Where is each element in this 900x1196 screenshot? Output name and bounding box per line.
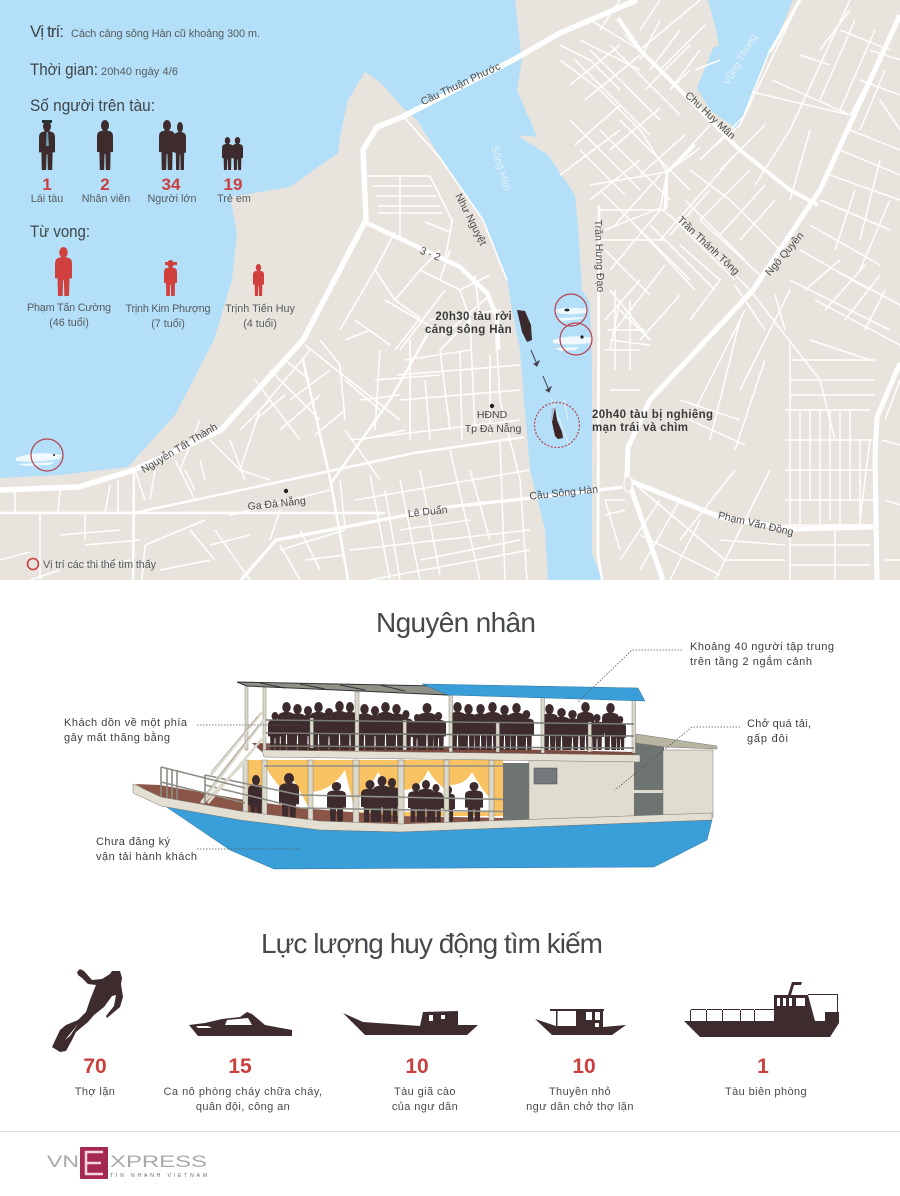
victim 1 — [27, 247, 111, 329]
street labels: Như Nguyệt — [452, 192, 489, 248]
figure: captain: 1 — [42, 175, 52, 194]
arrow 2 — [543, 376, 551, 392]
stat: small boats: ngư dân chở thợ lặn — [526, 1101, 634, 1113]
heading: causes: Nguyên nhân — [376, 607, 536, 638]
panel: map — [0, 0, 900, 580]
legend: Vị trí các thi thể tìm thấy — [43, 559, 157, 571]
main roads — [0, 0, 637, 490]
water: Vũng Thùng bay — [697, 0, 793, 128]
heading: people on board: Số người trên tàu: — [30, 96, 155, 115]
figure: crew: Nhân viên — [82, 193, 130, 205]
figure: adults: 34 — [162, 175, 181, 194]
figure: children: 19 — [224, 175, 242, 194]
rear cabin — [663, 750, 713, 817]
land: east bank — [515, 0, 900, 580]
street labels: Tp Đà Nẵng — [465, 422, 521, 435]
stat: patrol boat — [725, 1055, 807, 1098]
street labels — [139, 32, 806, 539]
heading: deaths: Từ vong: — [30, 222, 90, 241]
heading: search forces: Lực lượng huy động tìm kiếm — [261, 928, 603, 959]
callout: unregistered — [96, 836, 300, 863]
info: location: Cách cảng sông Hàn cũ khoảng 300 m. — [71, 28, 260, 40]
icon: diver — [52, 969, 123, 1052]
stat: trawlers: Tàu giã cào — [394, 1086, 456, 1098]
stat: trawlers — [392, 1055, 458, 1113]
ship at 20h30 — [517, 310, 532, 342]
victim 2 — [126, 260, 210, 330]
victim 2: (7 tuổi) — [151, 318, 185, 330]
stat: divers: Thợ lặn — [75, 1086, 115, 1098]
icon: patrol boat — [684, 982, 839, 1037]
victim 3: (4 tuổi) — [243, 318, 277, 330]
minor roads — [305, 115, 520, 440]
stat: patrol boat: 1 — [757, 1055, 769, 1078]
cream cabin — [529, 760, 635, 822]
stat: speedboats: Ca nô phòng cháy chữa cháy, — [164, 1086, 322, 1098]
callout: imbalance: gây mất thăng bằng — [64, 731, 170, 744]
event label 20h30: cảng sông Hàn — [425, 324, 512, 336]
icon: children — [222, 137, 243, 170]
icon: speedboat — [189, 1012, 292, 1036]
body marker 3 — [16, 439, 63, 471]
stat: speedboats: quân đội, công an — [196, 1101, 290, 1113]
lower columns — [243, 760, 494, 826]
street labels: Trần Thánh Tông — [675, 214, 742, 278]
stat: speedboats — [164, 1055, 322, 1113]
metal roof — [237, 682, 448, 695]
figure: captain — [31, 175, 63, 205]
lower deck floor — [135, 784, 530, 826]
info: time: 20h40 ngày 4/6 — [101, 66, 178, 78]
landmark dots — [284, 404, 494, 493]
victim 1: Phạm Tấn Cường — [27, 302, 111, 314]
stat: trawlers: 10 — [405, 1055, 429, 1078]
stat: small boats: 10 — [572, 1055, 596, 1078]
victim 1: (46 tuổi) — [49, 317, 89, 329]
figure: adults: Người lớn — [148, 193, 196, 205]
callout: imbalance — [64, 717, 300, 744]
street labels: Phạm Văn Đồng — [717, 510, 795, 539]
blue roof — [422, 684, 645, 701]
lower crowd — [248, 773, 483, 822]
street labels: Cầu Thuận Phước — [419, 61, 503, 108]
callout: unregistered: Chưa đăng ký — [96, 836, 170, 848]
event label 20h40: mạn trái và chìm — [592, 422, 688, 434]
street labels: Sông Hàn — [488, 144, 513, 192]
callout: unregistered: vận tải hành khách — [96, 851, 197, 863]
callout: overloaded: Chở quá tải, — [747, 718, 811, 730]
logo: VnExpress: VN — [47, 1152, 79, 1171]
info: location: Vị trí: — [30, 22, 64, 41]
upper deck floor — [252, 743, 634, 757]
figure: children: Trẻ em — [217, 193, 251, 205]
callout: overloaded — [615, 718, 811, 790]
arrow 1 — [531, 350, 539, 366]
info: location — [30, 22, 260, 41]
stat: divers: 70 — [83, 1055, 107, 1078]
deck strip — [133, 784, 712, 832]
figure: children — [217, 175, 251, 205]
body marker 1 — [555, 294, 587, 326]
street labels: 3 - 2 — [418, 245, 442, 264]
stat: patrol boat: Tàu biên phòng — [725, 1086, 807, 1098]
icon: trawler — [343, 1011, 478, 1035]
grey doorway — [503, 763, 530, 822]
figure: adults — [148, 175, 196, 205]
street labels: Vũng Thùng — [721, 32, 760, 87]
window — [534, 768, 557, 784]
event label 20h30: 20h30 tàu rời — [435, 311, 512, 323]
lower rail — [205, 766, 530, 812]
event label 20h40: 20h40 tàu bị nghiêng — [592, 409, 713, 421]
icon: adults — [159, 120, 186, 170]
icon: crew — [97, 120, 113, 170]
street labels: HĐND — [477, 409, 508, 421]
street labels: Chu Huy Mân — [682, 90, 738, 142]
rear roof — [636, 734, 717, 749]
stat: speedboats: 15 — [228, 1055, 252, 1078]
street labels: Ga Đà Nẵng — [247, 494, 306, 513]
rear grey section — [634, 743, 664, 820]
callout: overloaded: gấp đôi — [747, 733, 788, 745]
logo: VnExpress: TIN NHANH VIETNAM — [110, 1173, 207, 1179]
stat: small boats: Thuyền nhỏ — [549, 1086, 611, 1098]
sinking ship marker — [534, 398, 580, 448]
street labels: Cầu Sông Hàn — [529, 483, 599, 503]
stat: trawlers: của ngư dân — [392, 1101, 458, 1113]
stat: small boats — [526, 1055, 634, 1113]
street labels: Lê Duẩn — [407, 504, 448, 520]
street labels: Ngô Quyền — [763, 230, 806, 278]
icon: captain — [39, 120, 55, 170]
upper crowd — [268, 701, 626, 750]
bow rail — [161, 767, 245, 803]
logo: VnExpress: XPRESS — [110, 1152, 207, 1171]
logo: VnExpress — [47, 1147, 207, 1179]
windows — [266, 768, 490, 812]
victim 3 — [225, 264, 296, 330]
victim 2: Trịnh Kim Phượng — [126, 303, 210, 315]
figure: captain: Lái tàu — [31, 193, 63, 205]
body marker 2 — [553, 323, 592, 355]
curtains — [246, 760, 503, 816]
icon: small boat — [535, 1009, 626, 1035]
illustration: boat — [133, 682, 717, 869]
info: time: Thời gian: — [30, 60, 98, 79]
upper posts — [245, 684, 636, 753]
blue hull — [165, 806, 712, 869]
street labels: Trần Hưng Đạo — [592, 219, 606, 293]
figure: crew: 2 — [100, 175, 110, 194]
callout: upper deck crowd: trên tầng 2 ngắm cảnh — [690, 655, 812, 668]
stairs — [201, 712, 266, 803]
victim 3: Trịnh Tiến Huy — [225, 303, 296, 315]
upper deck strip — [262, 750, 640, 762]
street labels: Nguyễn Tất Thành — [139, 420, 220, 476]
callout: imbalance: Khách dồn về một phía — [64, 717, 188, 729]
callout: upper deck crowd: Khoảng 40 người tập trung — [690, 641, 834, 653]
info: time — [30, 60, 178, 79]
callout: upper deck crowd — [578, 641, 834, 702]
land: west bank — [0, 72, 548, 580]
upper rail — [266, 720, 634, 748]
stat: divers — [75, 1055, 115, 1098]
figure: crew — [82, 175, 130, 205]
